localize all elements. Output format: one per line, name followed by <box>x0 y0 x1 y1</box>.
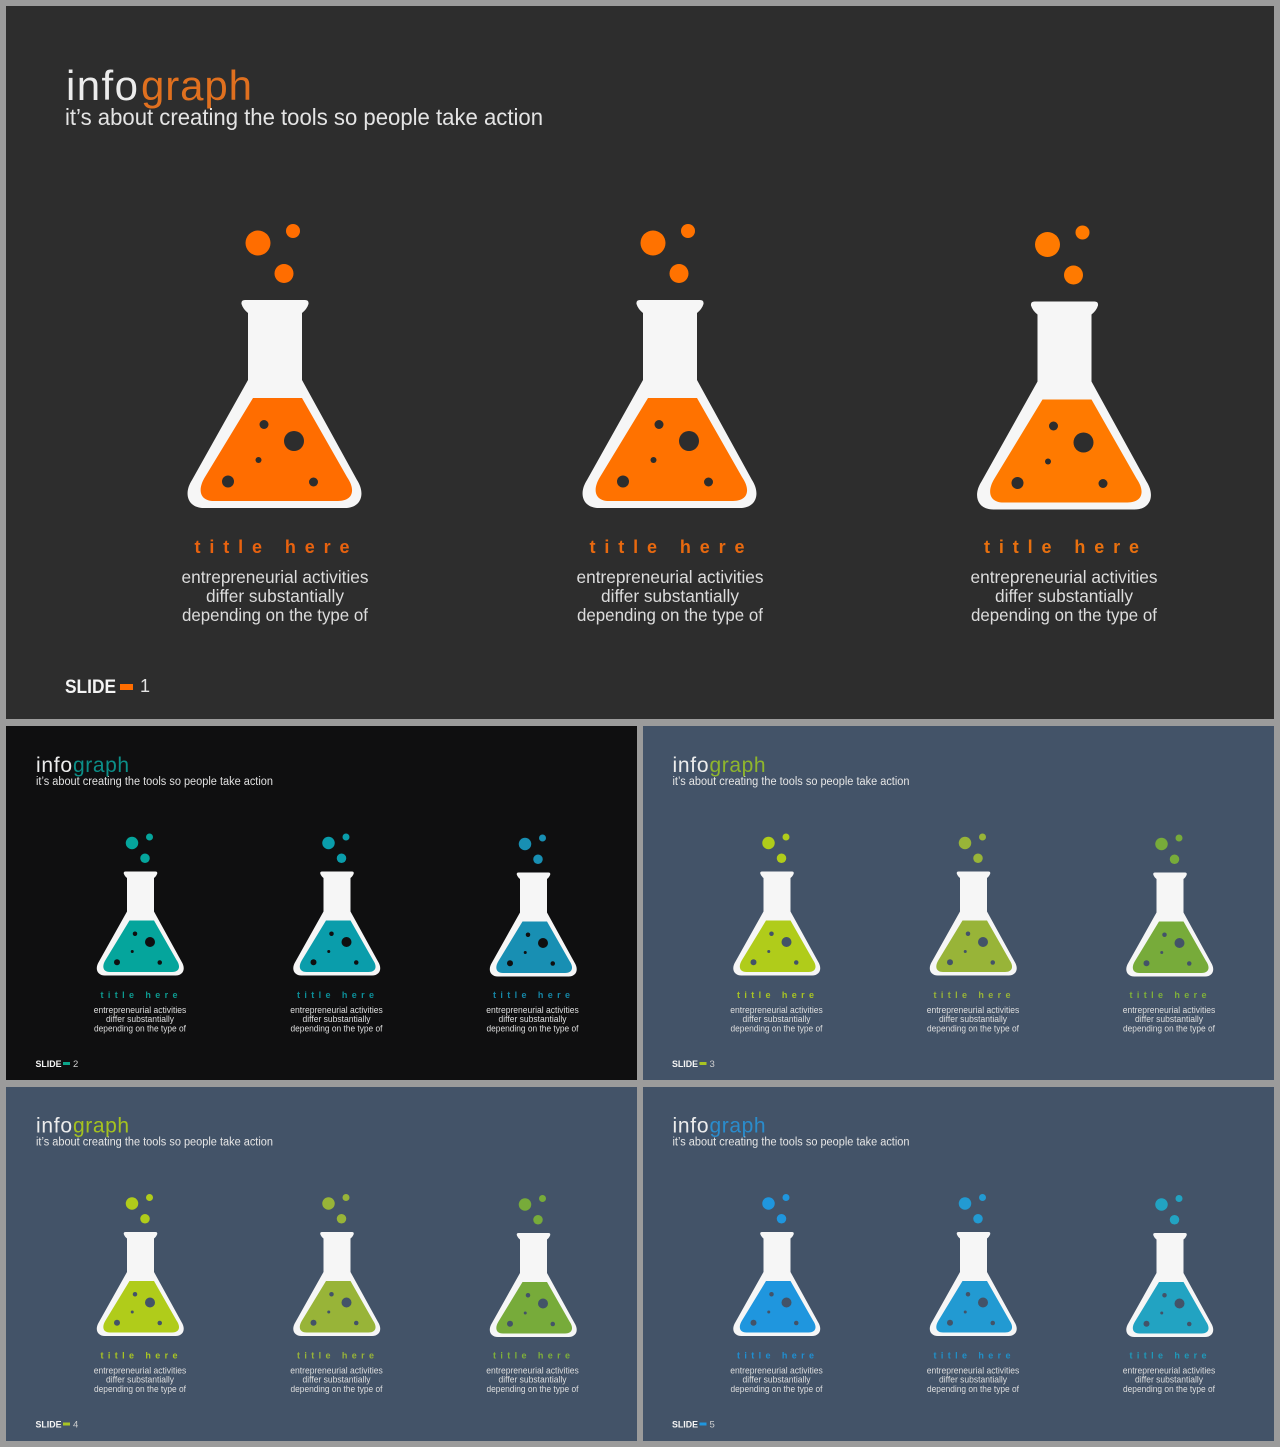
column text 1: title here <box>737 1350 814 1360</box>
column text 1: entrepreneurial activities <box>730 1005 823 1015</box>
column text 2: differ substantially <box>601 586 739 606</box>
subtitle: it’s about creating the tools so people take action <box>36 1136 273 1148</box>
title: info <box>36 754 72 777</box>
column text 3: depending on the type of <box>1123 1384 1215 1394</box>
column text 3: entrepreneurial activities <box>486 1005 579 1015</box>
column text 1: title here <box>100 990 178 1000</box>
column text 3: title here <box>493 1350 570 1360</box>
column text 3: title here <box>493 990 570 1000</box>
column text 2: entrepreneurial activities <box>290 1005 383 1015</box>
column text 1: entrepreneurial activities <box>730 1366 823 1376</box>
column text 2 <box>927 990 1020 1034</box>
column text 2: title here <box>590 537 744 557</box>
icon: flask 3 <box>1126 834 1213 976</box>
column text 1: depending on the type of <box>94 1024 186 1034</box>
icon: flask 3 <box>490 1195 577 1337</box>
column text 3: entrepreneurial activities <box>1123 1005 1216 1015</box>
column text 2 <box>290 990 383 1034</box>
column text 3: title here <box>984 537 1139 557</box>
column text 3 <box>486 990 579 1034</box>
panel: slide 1 <box>6 6 1274 719</box>
title <box>66 62 252 109</box>
subtitle: it’s about creating the tools so people take action <box>65 104 543 130</box>
column text 2: entrepreneurial activities <box>927 1005 1020 1015</box>
column text 2: differ substantially <box>939 1374 1007 1384</box>
slide number <box>36 1059 78 1070</box>
column text 2: depending on the type of <box>927 1024 1019 1034</box>
column text 2: title here <box>934 990 1010 1000</box>
slide number <box>36 1420 78 1430</box>
column text 1: entrepreneurial activities <box>182 567 369 587</box>
column text 1 <box>94 990 187 1034</box>
column text 3: depending on the type of <box>486 1384 579 1394</box>
slide number: 4 <box>73 1420 78 1430</box>
slide number: 3 <box>710 1059 715 1070</box>
column text 1: depending on the type of <box>730 1024 823 1034</box>
column text 2: entrepreneurial activities <box>290 1366 383 1376</box>
column text 1: differ substantially <box>206 586 344 606</box>
column text 2 <box>290 1350 383 1394</box>
column text 3 <box>1123 1350 1216 1394</box>
column text 3: depending on the type of <box>486 1024 579 1034</box>
icon: flask 3 <box>977 226 1151 510</box>
column text 3: depending on the type of <box>971 605 1157 625</box>
title <box>672 1114 766 1138</box>
column text 1 <box>94 1350 187 1394</box>
slide number: SLIDE <box>36 1059 62 1070</box>
column text 3: differ substantially <box>1135 1374 1203 1384</box>
column text 2: depending on the type of <box>290 1384 383 1394</box>
slide number: 5 <box>710 1420 715 1430</box>
column text 2: differ substantially <box>939 1014 1007 1024</box>
panel: slide 2 <box>6 726 637 1080</box>
icon: flask 1 <box>188 224 361 508</box>
column text 2 <box>576 537 764 625</box>
title <box>36 1114 129 1138</box>
title: graph <box>73 1114 129 1138</box>
subtitle: it’s about creating the tools so people take action <box>36 776 273 788</box>
column text 2: depending on the type of <box>290 1024 383 1034</box>
title: info <box>672 754 708 777</box>
column text 1: title here <box>194 537 350 557</box>
slide number: SLIDE <box>672 1420 698 1430</box>
title: info <box>36 1114 72 1138</box>
icon: flask 3 <box>490 834 577 976</box>
column text 3: differ substantially <box>498 1374 567 1384</box>
column text 2: entrepreneurial activities <box>576 567 764 587</box>
column text 2 <box>927 1350 1020 1394</box>
column text 2: depending on the type of <box>927 1384 1019 1394</box>
icon: flask 1 <box>733 1194 820 1336</box>
slide number: SLIDE <box>672 1059 698 1070</box>
subtitle: it’s about creating the tools so people take action <box>672 1136 910 1148</box>
icon: flask 1 <box>97 1194 184 1336</box>
column text 1 <box>182 537 369 625</box>
column text 3: differ substantially <box>498 1014 567 1024</box>
column text 1: depending on the type of <box>182 605 368 625</box>
column text 3: entrepreneurial activities <box>970 567 1158 587</box>
panel: slide 4 <box>6 1087 637 1441</box>
title: info <box>66 62 138 109</box>
slide number: SLIDE <box>36 1420 62 1430</box>
slide number <box>672 1420 715 1430</box>
subtitle: it’s about creating the tools so people take action <box>672 776 910 788</box>
column text 3: title here <box>1130 990 1206 1000</box>
column text 3: differ substantially <box>1135 1014 1203 1024</box>
panel: slide 3 <box>643 726 1274 1080</box>
icon: flask 3 <box>1126 1195 1213 1337</box>
icon: flask 2 <box>293 1194 380 1336</box>
slide number: 1 <box>140 676 150 696</box>
title: graph <box>141 62 252 109</box>
column text 1: differ substantially <box>106 1014 174 1024</box>
column text 1 <box>730 1350 823 1394</box>
column text 1: title here <box>737 990 814 1000</box>
column text 1: differ substantially <box>742 1014 811 1024</box>
column text 1: depending on the type of <box>730 1384 823 1394</box>
column text 2: entrepreneurial activities <box>927 1366 1020 1376</box>
column text 2: title here <box>934 1350 1010 1360</box>
title: graph <box>73 754 129 777</box>
icon: flask 2 <box>293 834 380 976</box>
column text 1: differ substantially <box>106 1374 174 1384</box>
title <box>36 754 129 777</box>
column text 1 <box>730 990 823 1034</box>
column text 3: depending on the type of <box>1123 1024 1215 1034</box>
icon: flask 2 <box>930 834 1017 976</box>
panel: slide 5 <box>643 1087 1274 1441</box>
column text 2: depending on the type of <box>577 605 763 625</box>
column text 1: depending on the type of <box>94 1384 186 1394</box>
column text 1: entrepreneurial activities <box>94 1005 187 1015</box>
icon: flask 1 <box>97 834 184 976</box>
column text 3: entrepreneurial activities <box>1123 1366 1216 1376</box>
title: info <box>672 1114 708 1138</box>
column text 2: title here <box>297 990 374 1000</box>
slide number: SLIDE <box>65 677 116 698</box>
column text 3 <box>970 537 1158 625</box>
column text 3 <box>1123 990 1216 1034</box>
slide number <box>65 676 150 698</box>
column text 1: differ substantially <box>742 1374 811 1384</box>
slide number <box>672 1059 715 1070</box>
title: graph <box>710 1114 766 1138</box>
title: graph <box>710 754 766 777</box>
column text 2: title here <box>297 1350 374 1360</box>
column text 1: entrepreneurial activities <box>94 1366 187 1376</box>
icon: flask 1 <box>733 834 820 976</box>
column text 3 <box>486 1350 579 1394</box>
title <box>672 754 766 777</box>
column text 2: differ substantially <box>302 1374 371 1384</box>
column text 2: differ substantially <box>302 1014 371 1024</box>
column text 3: differ substantially <box>995 586 1133 606</box>
slide number: 2 <box>73 1059 78 1070</box>
column text 3: entrepreneurial activities <box>486 1366 579 1376</box>
icon: flask 2 <box>930 1194 1017 1336</box>
icon: flask 2 <box>583 224 756 508</box>
column text 1: title here <box>100 1350 178 1360</box>
column text 3: title here <box>1130 1350 1206 1360</box>
